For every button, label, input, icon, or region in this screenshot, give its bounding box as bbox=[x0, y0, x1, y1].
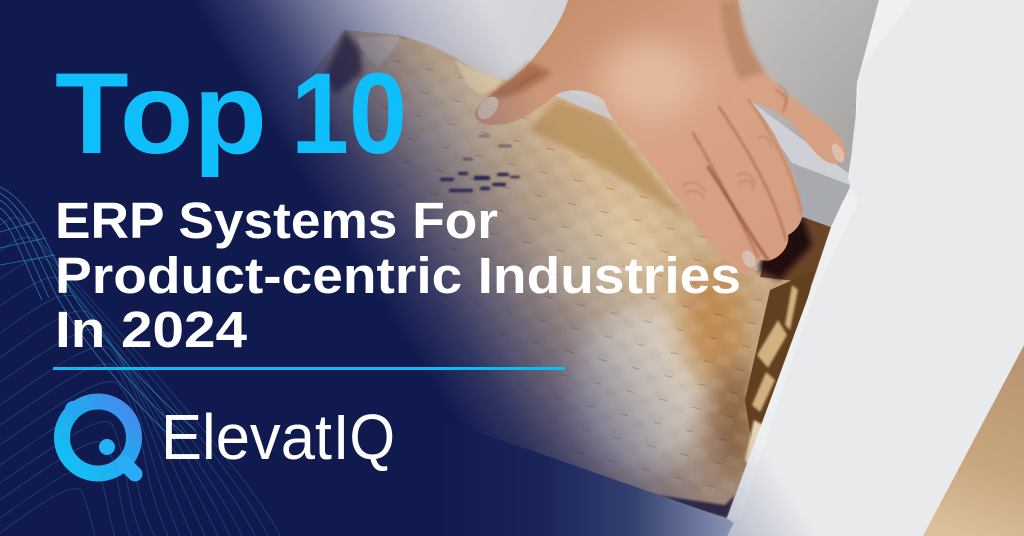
subtitle line 3: In 2024 bbox=[55, 301, 248, 358]
wood table corner bbox=[923, 345, 1024, 536]
wordmark: IQ bbox=[333, 401, 395, 473]
crumpled paper lattice at right bbox=[745, 270, 815, 470]
hand shading bbox=[600, 40, 700, 120]
torn paper highlight near thumb bbox=[455, 60, 503, 95]
box bottom rim fading into navy bbox=[300, 400, 734, 536]
fingernails bbox=[474, 93, 502, 123]
decorative wave mesh bbox=[0, 217, 280, 536]
hand bbox=[474, 0, 847, 273]
title: Top 10: Top bbox=[55, 50, 267, 178]
bright mesh ridge bbox=[0, 187, 195, 440]
kraft paper bbox=[300, 30, 822, 518]
inner lip of the wall bbox=[727, 187, 859, 520]
title: Top 10 bbox=[55, 50, 407, 178]
subtitle line 2: Product-centric Industries bbox=[55, 247, 741, 304]
subtitle line 1: ERP Systems For bbox=[55, 192, 498, 249]
title: Top 10: 10 bbox=[291, 50, 407, 178]
main box wall bbox=[727, 0, 1024, 536]
white box walls bbox=[727, 0, 1024, 536]
perforation holes cluster bbox=[440, 135, 520, 192]
dark gap beneath the fingers bbox=[758, 217, 831, 283]
finger separations bbox=[520, 74, 801, 260]
knuckle creases bbox=[682, 85, 787, 198]
wordmark: Elevat bbox=[161, 401, 332, 473]
icon: Q mark bbox=[62, 401, 135, 474]
dark lower edge of paper bbox=[610, 488, 735, 518]
logo: ElevatIQ bbox=[62, 401, 395, 474]
subtitle bbox=[55, 192, 741, 358]
divider line bbox=[53, 367, 565, 370]
white folded box liner bbox=[559, 87, 850, 227]
upper flap bbox=[848, 0, 913, 177]
dark fold at top left of paper bbox=[325, 30, 362, 95]
